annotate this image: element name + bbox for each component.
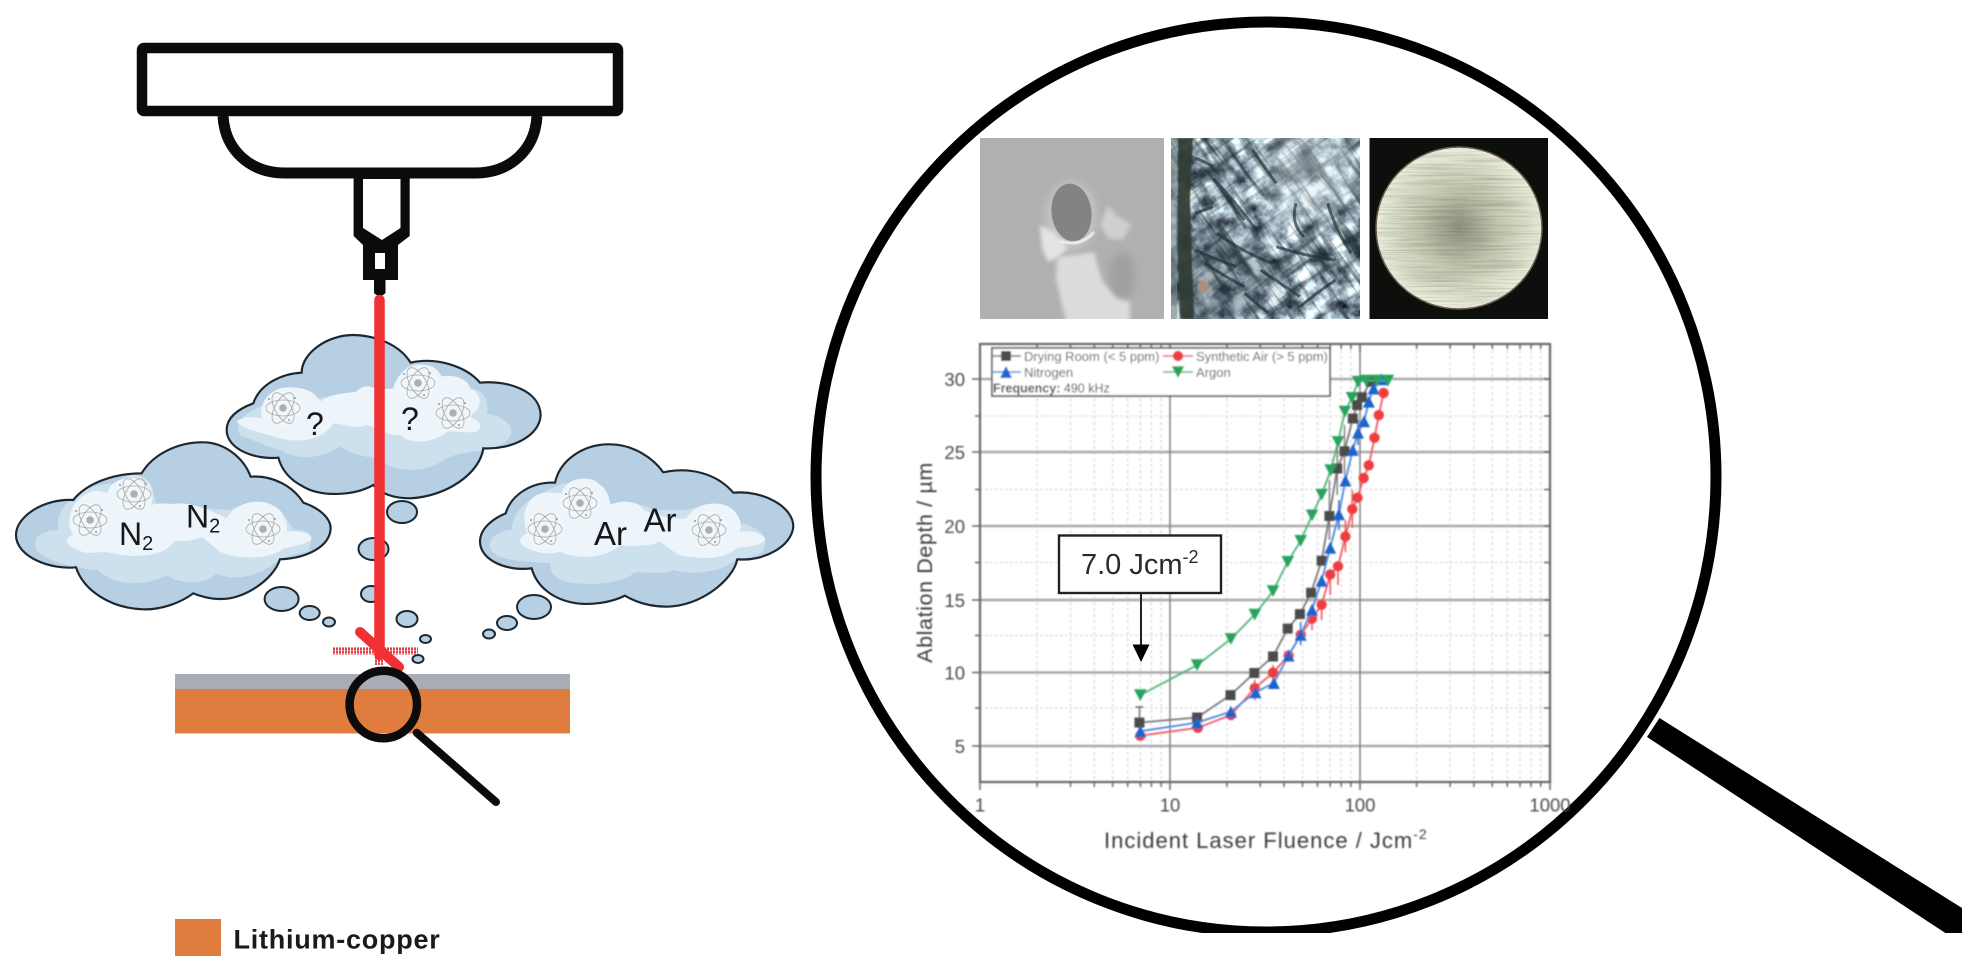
error bars xyxy=(1136,420,1358,723)
thought bubbles xyxy=(265,501,551,663)
label: N2: N xyxy=(119,516,142,552)
label: N2: N xyxy=(186,498,209,534)
callout: 7.0 Jcm-2 xyxy=(1059,536,1221,662)
cloud: nitrogen xyxy=(16,442,331,609)
y axis numbers xyxy=(944,369,965,757)
micrograph: circular ablation spot xyxy=(1370,138,1548,319)
y axis numbers: 30 xyxy=(944,369,965,390)
axis ticks xyxy=(972,344,1550,790)
magnifier lens ring xyxy=(816,22,1716,932)
cloud: unknown gas xyxy=(227,335,541,498)
legend text: drying room: Drying Room (< 5 ppm) xyxy=(1024,349,1159,364)
atom icon xyxy=(526,510,564,548)
series: synthetic air xyxy=(1140,393,1384,736)
legend text: synthetic air: Synthetic Air (> 5 ppm) xyxy=(1196,349,1328,364)
substrate: coating layer xyxy=(175,674,570,689)
legend key: argon xyxy=(1163,371,1193,373)
y axis numbers: 10 xyxy=(944,662,965,684)
micrograph: dendritic surface xyxy=(1171,138,1360,319)
y axis numbers: 20 xyxy=(944,516,965,537)
argon cloud shape xyxy=(480,444,793,607)
x axis numbers xyxy=(975,794,1571,816)
laser head bowl xyxy=(223,116,537,173)
legend: lithium-copper xyxy=(175,919,440,956)
major grid xyxy=(980,379,1550,746)
x axis numbers: 10 xyxy=(1160,794,1180,816)
x axis title: -2 xyxy=(1413,826,1428,842)
atom icon xyxy=(244,510,282,548)
label: N2: 2 xyxy=(209,516,220,538)
chart: ablation depth vs fluence xyxy=(913,344,1571,853)
laser beam xyxy=(360,300,399,667)
atom icon xyxy=(115,475,153,513)
x axis title: Incident Laser Fluence / Jcm xyxy=(1104,828,1413,853)
minor vertical grid xyxy=(1037,344,1541,782)
series: drying room xyxy=(1139,380,1381,723)
atom icon xyxy=(71,501,109,539)
series: nitrogen xyxy=(1140,379,1381,731)
magnifier handle xyxy=(1647,718,1962,940)
callout text: -2 xyxy=(1183,547,1199,567)
x axis numbers: 100 xyxy=(1345,794,1375,816)
legend swatch xyxy=(175,919,221,956)
nitrogen cloud shape xyxy=(16,442,331,609)
callout box xyxy=(1059,536,1221,593)
small magnifier icon xyxy=(350,671,496,802)
laser nozzle xyxy=(354,176,410,296)
legend text: nitrogen: Nitrogen xyxy=(1024,365,1073,380)
large magnifier xyxy=(816,22,1962,940)
cloud: argon xyxy=(480,444,793,607)
label: Ar: Ar xyxy=(594,515,627,552)
atom icon xyxy=(434,394,472,432)
series: argon xyxy=(1140,381,1388,695)
frequency note: Frequency: 490 kHz xyxy=(993,382,1110,396)
chart legend xyxy=(992,348,1330,396)
y axis numbers: 5 xyxy=(955,736,965,757)
micrograph: keyhole SEM image xyxy=(980,138,1164,325)
unknown gas cloud shape xyxy=(227,335,541,498)
minor horizontal grid xyxy=(980,416,1550,708)
x axis numbers: 1 xyxy=(975,794,985,816)
plot frame xyxy=(980,344,1550,782)
label: Ar: Ar xyxy=(644,502,677,538)
y axis title: Ablation Depth / µm xyxy=(913,462,937,663)
label: question mark: ? xyxy=(401,401,419,437)
callout arrow xyxy=(1132,593,1150,662)
plume dots xyxy=(332,647,418,665)
atom icon xyxy=(399,364,437,402)
atom icon xyxy=(561,484,599,522)
y axis numbers: 15 xyxy=(944,590,965,611)
legend label: Lithium-copper xyxy=(234,924,440,954)
label: question mark: ? xyxy=(306,406,324,442)
y axis numbers: 25 xyxy=(944,442,965,463)
legend key: drying room xyxy=(992,355,1021,357)
x axis numbers: 1000 xyxy=(1529,794,1571,816)
callout text: 7.0 Jcm xyxy=(1081,549,1183,581)
legend key: nitrogen xyxy=(992,371,1021,373)
label: N2: 2 xyxy=(142,533,153,555)
laser head top plate xyxy=(142,48,618,111)
atom icon xyxy=(690,511,728,549)
legend key: synthetic air xyxy=(1163,355,1193,357)
laser head xyxy=(142,48,618,296)
legend text: argon: Argon xyxy=(1196,365,1231,380)
atom icon xyxy=(264,389,302,427)
substrate: lithium-copper layer xyxy=(175,689,570,734)
